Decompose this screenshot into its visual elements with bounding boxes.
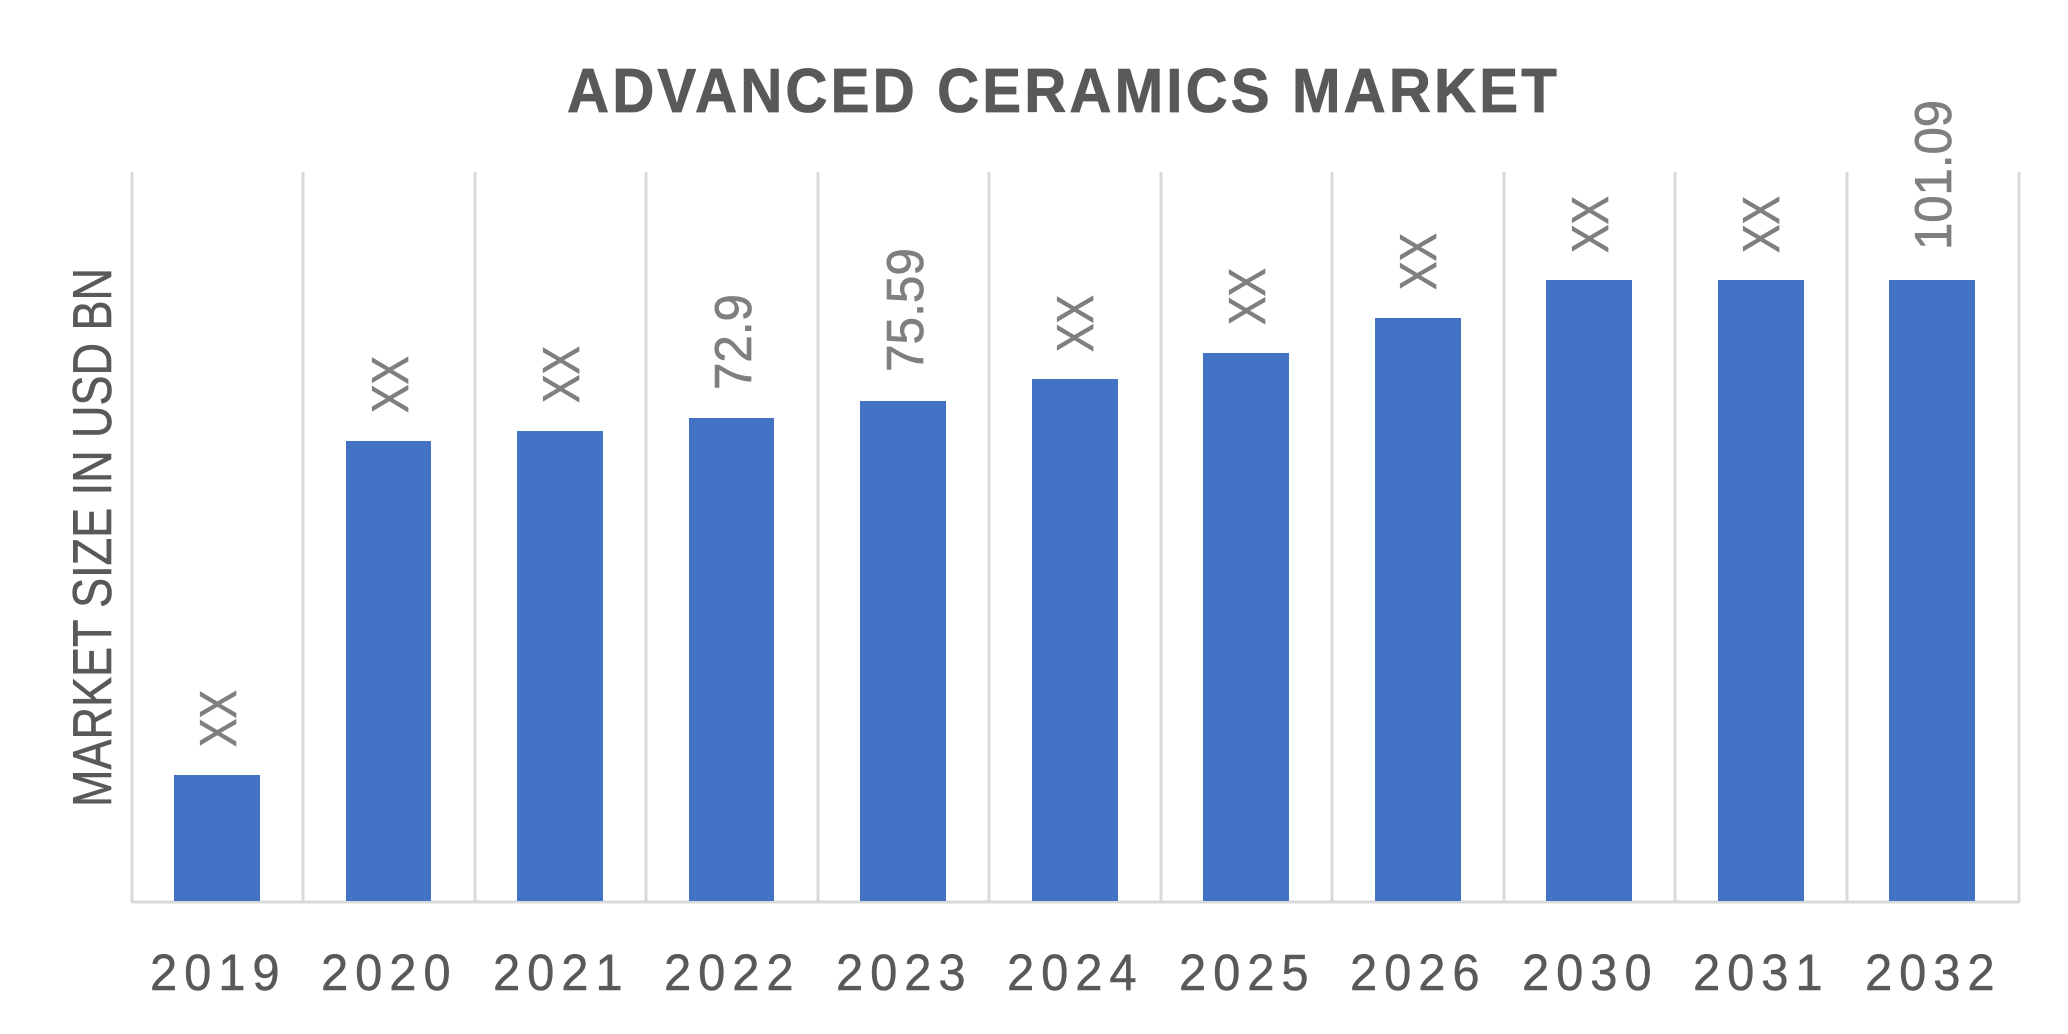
label 2024: XX bbox=[1047, 295, 1105, 352]
x-axis year labels bbox=[150, 944, 1995, 1001]
bars bbox=[174, 280, 1975, 901]
bar 2022 bbox=[689, 418, 774, 901]
label 2032: 101.09 bbox=[1905, 100, 1963, 250]
year 2032: 2032 bbox=[1865, 944, 1995, 1001]
label 2020: XX bbox=[362, 356, 420, 413]
year 2025: 2025 bbox=[1179, 944, 1309, 1001]
bar 2024 bbox=[1032, 379, 1118, 901]
year 2022: 2022 bbox=[664, 944, 794, 1001]
year 2023: 2023 bbox=[836, 944, 966, 1001]
label 2026: XX bbox=[1390, 233, 1448, 290]
label 2031: XX bbox=[1733, 196, 1791, 253]
year 2030: 2030 bbox=[1522, 944, 1652, 1001]
year 2020: 2020 bbox=[321, 944, 451, 1001]
bar 2021 bbox=[517, 431, 603, 901]
bar 2025 bbox=[1203, 353, 1289, 901]
y-axis title: MARKET SIZE IN USD BN bbox=[61, 268, 123, 807]
label 2023: 75.59 bbox=[877, 248, 935, 372]
year 2021: 2021 bbox=[493, 944, 623, 1001]
bar 2030 bbox=[1546, 280, 1632, 901]
year 2019: 2019 bbox=[150, 944, 280, 1001]
label 2030: XX bbox=[1562, 196, 1620, 253]
label 2022: 72.9 bbox=[705, 294, 763, 390]
year 2031: 2031 bbox=[1693, 944, 1823, 1001]
year 2026: 2026 bbox=[1350, 944, 1480, 1001]
year 2024: 2024 bbox=[1007, 944, 1137, 1001]
label 2025: XX bbox=[1219, 268, 1277, 325]
bar 2031 bbox=[1718, 280, 1804, 901]
bar 2019 bbox=[174, 775, 260, 901]
title: ADVANCED CERAMICS MARKET bbox=[567, 56, 1557, 125]
label 2019: XX bbox=[190, 690, 248, 747]
bar 2026 bbox=[1375, 318, 1461, 901]
bar 2032 bbox=[1889, 280, 1975, 901]
data labels bbox=[190, 100, 1963, 747]
bar 2020 bbox=[346, 441, 431, 901]
bar 2023 bbox=[860, 401, 946, 901]
label 2021: XX bbox=[533, 346, 591, 403]
